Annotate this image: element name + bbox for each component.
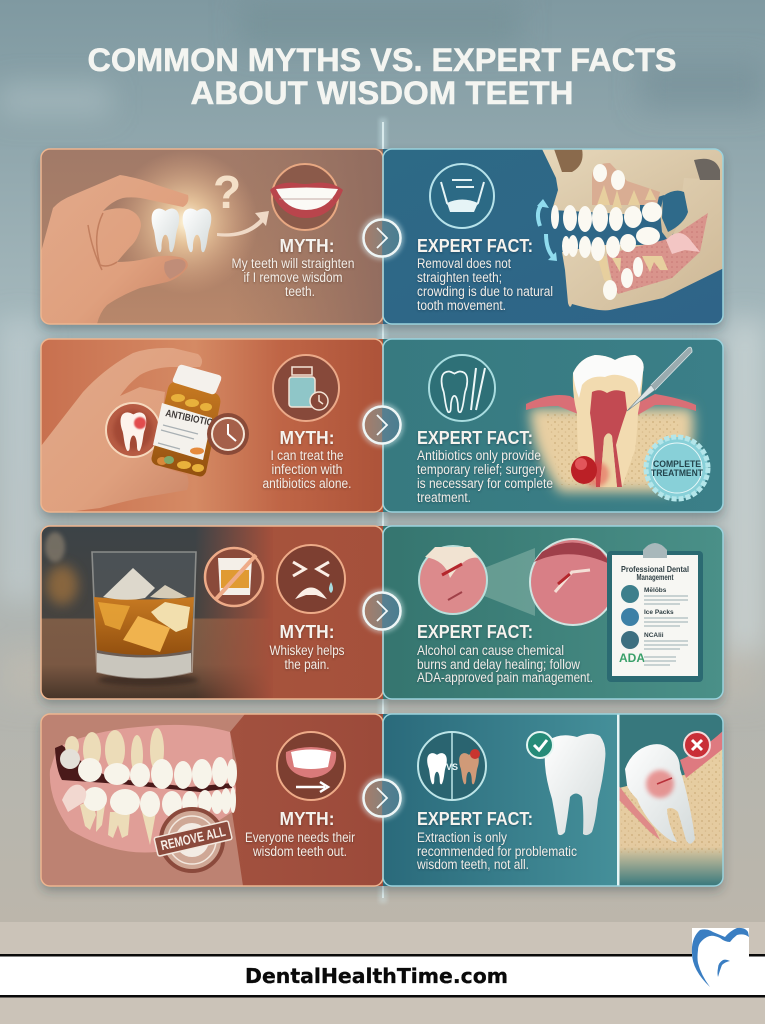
- illustration: professional dental management clipboard: Mēlōbs: [644, 587, 667, 594]
- illustration: gum burn circles: [419, 539, 616, 625]
- expert fact text row 1: EXPERT FACT:: [417, 236, 533, 256]
- expert fact text row 4: recommended for problematic: [417, 844, 577, 859]
- expert fact text row 2: EXPERT FACT:: [417, 428, 533, 448]
- icon: jaw circle: [430, 164, 494, 228]
- icon: medicine and clock circle: [273, 355, 339, 421]
- myth text row 4: MYTH:: [280, 809, 334, 829]
- illustration: professional dental management clipboard: [607, 543, 703, 682]
- expert fact text row 2: treatment.: [417, 490, 471, 505]
- expert fact text row 1: Removal does not: [417, 256, 511, 271]
- badge: complete treatment: COMPLETE: [653, 459, 701, 470]
- stamp: remove all: [154, 809, 232, 871]
- myth text row 4: Everyone needs their: [245, 830, 355, 845]
- footer band: [0, 954, 765, 998]
- panel: row 1 wisdom teeth straightening: [41, 149, 724, 324]
- myth text row 4: wisdom teeth out.: [252, 844, 347, 859]
- vertical centre divider: [379, 118, 387, 903]
- expert fact text row 3: EXPERT FACT:: [417, 622, 533, 642]
- icon: hand holding wisdom tooth: ?: [213, 166, 241, 218]
- expert fact text row 2: Antibiotics only provide: [417, 448, 541, 463]
- illustration: skull with impacted wisdom teeth: [537, 149, 724, 310]
- panel: row 4 everyone needs removal: [41, 714, 724, 886]
- expert fact text row 4: [416, 809, 577, 872]
- myth text row 2: antibiotics alone.: [262, 476, 352, 491]
- expert fact text row 1: crowding is due to natural: [417, 284, 553, 299]
- expert fact text row 1: straighten teeth;: [417, 270, 502, 285]
- title: COMMON MYTHS VS. EXPERT FACTS: [88, 42, 676, 78]
- expert fact text row 1: tooth movement.: [417, 298, 506, 313]
- illustration: damaged impacted tooth with cross: [619, 714, 724, 886]
- myth text row 1: My teeth will straighten: [232, 256, 354, 271]
- myth text row 1: MYTH:: [280, 236, 334, 256]
- expert fact text row 4: EXPERT FACT:: [417, 809, 533, 829]
- icon: smile circle: [270, 164, 343, 230]
- stamp: remove all: REMOVE ALL: [159, 824, 227, 853]
- arrow buttons on centre divider: [360, 216, 404, 820]
- footer band: DentalHealthTime.com: [245, 964, 508, 988]
- expert fact text row 2: [417, 428, 553, 505]
- expert fact text row 3: Alcohol can cause chemical: [417, 643, 564, 658]
- myth text row 3: [270, 622, 345, 672]
- myth text row 3: the pain.: [284, 657, 330, 672]
- myth text row 2: MYTH:: [280, 428, 334, 448]
- illustration: professional dental management clipboard: Professional Dental: [621, 564, 689, 574]
- illustration: healthy wisdom tooth with check: [527, 732, 605, 835]
- expert fact text row 3: ADA-approved pain management.: [417, 670, 593, 685]
- illustration: open mouth with teeth: [41, 714, 245, 886]
- expert fact text row 3: [417, 622, 593, 685]
- icon: hand with antibiotics bottle: [41, 348, 249, 513]
- panel: row 3 whiskey: [41, 526, 724, 699]
- myth text row 1: teeth.: [285, 284, 315, 299]
- illustration: tooth cross-section with abscess and scalpel: [526, 347, 696, 492]
- badge: complete treatment: TREATMENT: [651, 468, 703, 479]
- icon: no alcohol circle: [205, 548, 263, 606]
- title: ABOUT WISDOM TEETH: [190, 75, 574, 111]
- illustration: professional dental management clipboard: Ice Packs: [644, 609, 674, 616]
- expert fact text row 2: is necessary for complete: [417, 476, 553, 491]
- myth text row 4: [245, 809, 355, 859]
- icon: hand with antibiotics bottle: ANTIBIOTIC: [164, 408, 214, 429]
- icon: teeth arrow circle: [277, 732, 345, 800]
- expert fact text row 1: [417, 236, 553, 313]
- icon: healthy vs damaged tooth circle: VS: [446, 762, 458, 772]
- myth text row 2: [262, 428, 352, 491]
- expert fact text row 2: temporary relief; surgery: [417, 462, 545, 477]
- myth text row 3: Whiskey helps: [270, 643, 345, 658]
- myth text row 1: [232, 236, 354, 299]
- badge: complete treatment: [646, 437, 708, 499]
- icon: pained face circle: [277, 545, 345, 613]
- expert fact text row 4: Extraction is only: [417, 830, 507, 845]
- illustration: professional dental management clipboard: ADA: [619, 651, 645, 665]
- icon: tooth and tools circle: [429, 355, 495, 421]
- myth text row 3: MYTH:: [280, 622, 334, 642]
- expert fact text row 3: burns and delay healing; follow: [417, 657, 580, 672]
- expert fact text row 4: wisdom teeth, not all.: [416, 857, 529, 872]
- icon: hand holding wisdom tooth: [41, 150, 269, 324]
- logo: blue tooth outline: [692, 928, 749, 988]
- icon: healthy vs damaged tooth circle: [418, 732, 486, 800]
- myth text row 2: infection with: [272, 462, 342, 477]
- illustration: professional dental management clipboard: Management: [636, 572, 674, 582]
- illustration: professional dental management clipboard: NCAIii: [644, 632, 664, 639]
- title: [88, 42, 676, 111]
- myth text row 2: I can treat the: [270, 448, 344, 463]
- panel: row 2 antibiotics: [41, 339, 724, 513]
- illustration: whiskey glass on table: [41, 526, 273, 699]
- myth text row 1: if I remove wisdom: [244, 270, 342, 285]
